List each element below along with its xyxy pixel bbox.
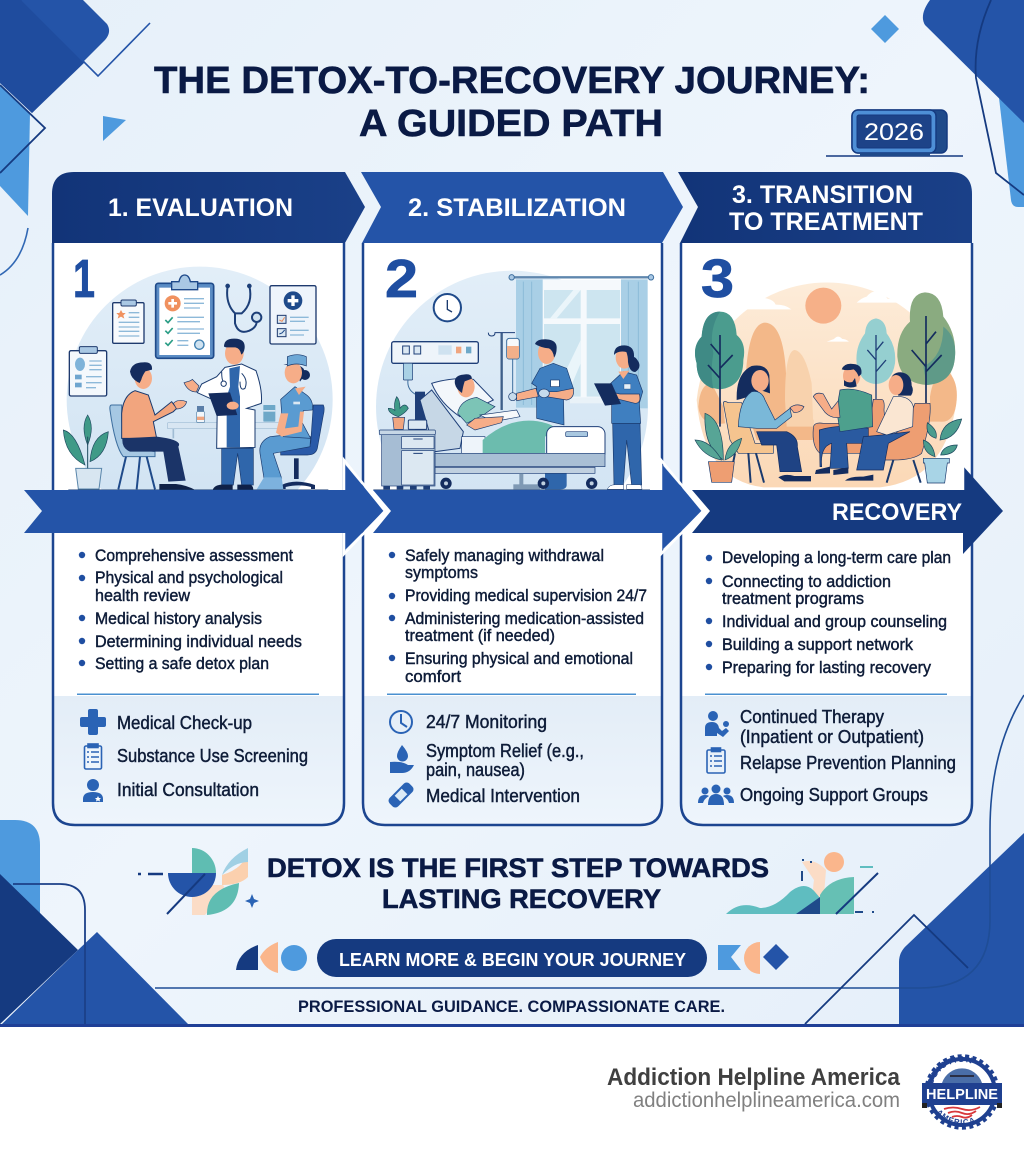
card body: [53, 243, 344, 825]
arrow band 1: [24, 460, 385, 554]
bullet list: stabilization: [389, 546, 647, 686]
icon: bandage: [387, 781, 415, 809]
header: 2. Stabilization: 2. STABILIZATION: [408, 194, 626, 222]
numeral 3: 3: [701, 249, 734, 309]
closing message: DETOX IS THE FIRST STEP TOWARDS: [267, 853, 769, 883]
feature list: stabilization: Symptom Relief (e.g.,: [426, 741, 584, 761]
shapes left of button: [236, 942, 307, 973]
feature list: evaluation: Substance Use Screening: [117, 746, 308, 766]
feature list: stabilization: pain, nausea): [426, 760, 525, 780]
shapes right of button: [718, 942, 789, 974]
icon: medical cross: [80, 709, 106, 735]
numeral 1: 1: [73, 249, 95, 309]
logo badge: HELPLINE: [926, 1087, 998, 1103]
right plant: [923, 419, 962, 483]
title: [154, 60, 870, 145]
patient: [110, 362, 195, 490]
wall panel: [392, 342, 478, 395]
table: [167, 423, 281, 429]
decoration: top left shapes: [0, 0, 150, 275]
footer brand text: [607, 1064, 901, 1112]
right ornament: [726, 852, 878, 914]
decoration: top right shapes: [923, 0, 1024, 207]
bullet list: stabilization: Ensuring physical and emotional: [405, 649, 633, 668]
closing message: LASTING RECOVERY: [382, 884, 661, 914]
IV stand: [488, 333, 519, 410]
header: 2. Stabilization: [361, 172, 683, 243]
bullet list: evaluation: Determining individual needs: [95, 632, 302, 651]
bullet list: transition: Preparing for lasting recovery: [722, 658, 931, 677]
panel: step 1 evaluation: [52, 172, 365, 825]
plant: [63, 415, 108, 489]
feature list: transition: Ongoing Support Groups: [740, 785, 928, 805]
bullet list: evaluation: Medical history analysis: [95, 609, 262, 628]
illustration: group counseling outdoors: [695, 283, 962, 487]
bullet list: stabilization: treatment (if needed): [405, 626, 555, 645]
header: 3. Transition to treatment: TO TREATMENT: [729, 208, 923, 236]
feature list: evaluation: [117, 713, 308, 800]
logo badge: AMERICA: [938, 1110, 974, 1123]
bullet list: transition: [706, 548, 951, 677]
header: 3. Transition to treatment: 3. TRANSITION: [732, 181, 913, 209]
logo badge: [922, 1054, 1002, 1130]
teal tree: [695, 312, 744, 427]
couple on sofa: [813, 364, 930, 483]
bullet list: stabilization: Safely managing withdrawal: [405, 546, 604, 565]
arrow band 2: [373, 460, 703, 554]
year badge 2026: 2026: [864, 119, 924, 146]
bullet list: stabilization: Providing medical supervision 24/7: [405, 586, 647, 605]
bullet list: evaluation: Setting a safe detox plan: [95, 654, 269, 673]
doctor: [184, 339, 262, 490]
icon: support group: [698, 784, 734, 805]
closing message: [267, 853, 769, 914]
light teal tree: [856, 318, 895, 400]
bullet list: evaluation: Physical and psychological: [95, 568, 283, 587]
bullet list: evaluation: Comprehensive assessment: [95, 546, 293, 565]
icon: clipboard: [84, 744, 102, 769]
bullet list: stabilization: comfort: [405, 667, 461, 686]
title: A GUIDED PATH: [359, 103, 663, 145]
bullet list: evaluation: [79, 546, 302, 673]
header: 3. Transition to treatment: [678, 172, 972, 243]
bullet list: stabilization: Administering medication-assisted: [405, 609, 644, 628]
icon: therapy person: [705, 711, 729, 737]
footer brand text: addictionhelplineamerica.com: [633, 1089, 900, 1112]
title: THE DETOX-TO-RECOVERY JOURNEY:: [154, 60, 870, 102]
button: learn more: [317, 939, 707, 977]
icon: consultation person: [83, 779, 103, 802]
decoration: small diamond: [871, 15, 899, 43]
nurse seated: [257, 355, 324, 489]
icon: drop and hand: [390, 745, 414, 773]
button: learn more: LEARN MORE & BEGIN YOUR JOURNEY: [339, 950, 686, 970]
feature list: transition: Continued Therapy: [740, 707, 884, 727]
left ornament: [138, 848, 259, 915]
card body: [681, 243, 972, 825]
bullet list: transition: Individual and group counseling: [722, 612, 947, 631]
panel: step 2 stabilization: [361, 172, 683, 825]
page bottom rule: [0, 1024, 1024, 1027]
decoration: small triangle: [103, 116, 126, 141]
header: 1. Evaluation: [52, 172, 365, 243]
numeral 2: 2: [385, 249, 418, 309]
arrow band 3 with recovery label: [692, 464, 1003, 554]
card body: [363, 243, 662, 825]
nurse standing: [509, 339, 574, 489]
arrow band 3 with recovery label: RECOVERY: [832, 499, 962, 526]
feature list: stabilization: [426, 712, 584, 806]
bullet list: evaluation: health review: [95, 586, 191, 605]
clock: [434, 294, 461, 321]
bullet list: transition: Developing a long-term care plan: [722, 548, 951, 567]
feature list: stabilization: Medical Intervention: [426, 786, 580, 806]
feature list: transition: (Inpatient or Outpatient): [740, 727, 924, 747]
tagline: PROFESSIONAL GUIDANCE. COMPASSIONATE CARE.: [298, 997, 725, 1016]
illustration: clinical evaluation scene: [63, 266, 333, 490]
decoration: bottom left shapes: [0, 820, 188, 1024]
decoration: bottom right shapes: [155, 695, 1024, 1024]
bed: [415, 374, 605, 489]
panel: step 3 transition to treatment: [678, 172, 972, 825]
feature list: transition: [740, 707, 956, 805]
footer brand text: Addiction Helpline America: [607, 1064, 901, 1091]
feature list: transition: Relapse Prevention Planning: [740, 753, 956, 773]
green tree: [897, 292, 955, 403]
nightstand: [379, 397, 435, 489]
feature list: stabilization: 24/7 Monitoring: [426, 712, 547, 732]
bullet list: transition: treatment programs: [722, 589, 864, 608]
logo badge: ADDICTION: [928, 1056, 972, 1083]
window: [509, 275, 654, 408]
feature list: evaluation: Initial Consultation: [117, 780, 259, 800]
illustration: hospital bed scene: [373, 270, 654, 490]
bullet list: transition: Building a support network: [722, 635, 913, 654]
nurse with tablet: [594, 345, 643, 489]
feature list: evaluation: Medical Check-up: [117, 713, 252, 733]
bullet list: stabilization: symptoms: [405, 563, 478, 582]
icon: planning clipboard: [707, 748, 725, 773]
footer white strip: [0, 1027, 1024, 1154]
icon: clock: [390, 711, 412, 733]
header: 1. Evaluation: 1. EVALUATION: [108, 194, 293, 222]
left plant: [695, 413, 742, 482]
bullet list: transition: Connecting to addiction: [722, 572, 891, 591]
year badge 2026: [826, 110, 963, 156]
woman in armchair: [723, 366, 811, 483]
